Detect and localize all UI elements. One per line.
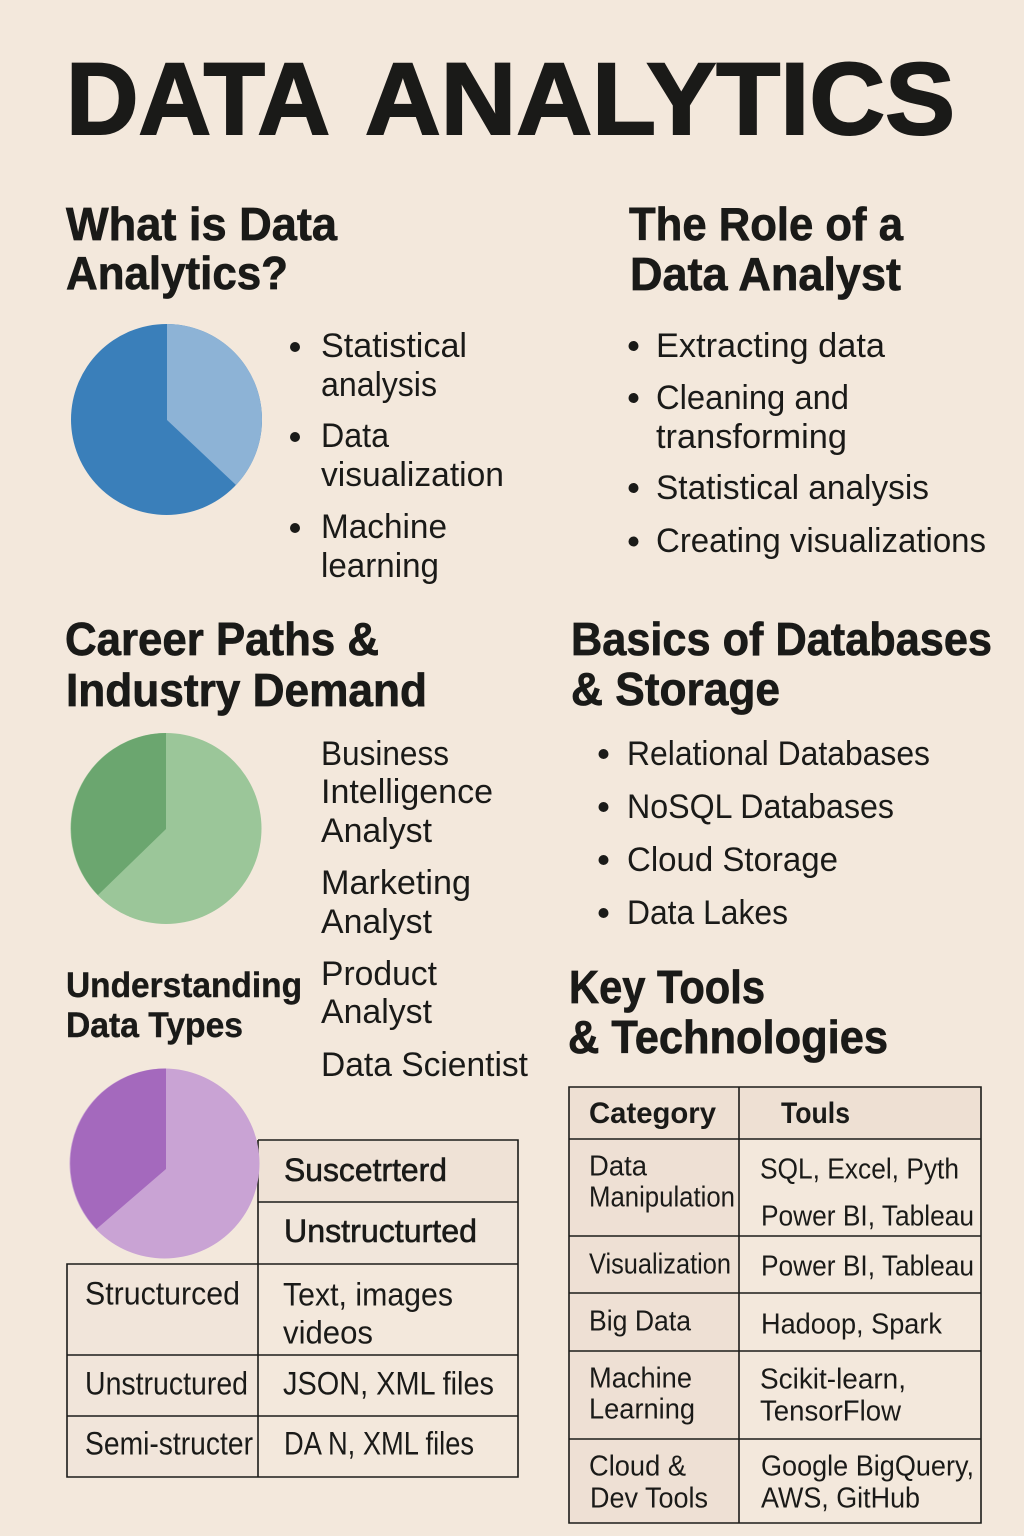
table: tools by category: Scikit-learn, [760, 1364, 906, 1396]
bullet list: analyst duties: transforming [656, 418, 847, 456]
text list: career roles: Analyst [321, 903, 433, 941]
bullet list: analytics topics: learning [321, 547, 439, 585]
panel: what is data analytics [66, 198, 504, 585]
heading: what is data analytics [66, 198, 337, 299]
bullet list: storage types: NoSQL Databases [627, 788, 894, 826]
table: tools by category [569, 1087, 981, 1523]
bullet list: analytics topics: visualization [321, 456, 504, 494]
table: tools by category: SQL, Excel, Pyth [760, 1154, 959, 1186]
heading: understanding data types [66, 966, 302, 1045]
table: tools by category: Dev Tools [590, 1483, 708, 1515]
heading: understanding data types: Understanding [66, 966, 302, 1005]
table: data types: Structurced [85, 1276, 240, 1312]
table: tools by category: Power BI, Tableau [761, 1201, 974, 1233]
heading: what is data analytics: What is Data [66, 198, 337, 250]
table: tools by category: TensorFlow [760, 1396, 902, 1428]
heading: what is data analytics: Analytics? [66, 247, 288, 299]
bullet list: analyst duties: Statistical analysis [656, 469, 929, 507]
table: tools by category: Power BI, Tableau [761, 1251, 974, 1283]
bullet list: storage types: Data Lakes [627, 894, 788, 932]
table: tools by category: Hadoop, Spark [761, 1309, 942, 1341]
heading: key tools and technologies [568, 961, 888, 1063]
bullet list: analytics topics: Machine [321, 508, 447, 546]
table: tools by category: Learning [589, 1394, 695, 1426]
panel: career paths [65, 613, 529, 1084]
table: tools by category: Machine [589, 1363, 692, 1395]
text list: career roles [321, 735, 529, 1084]
text list: career roles: Data Scientist [321, 1046, 529, 1084]
heading: key tools and technologies: & Technologies [568, 1011, 888, 1063]
bullet list: analytics topics: analysis [321, 366, 437, 404]
text list: career roles: Analyst [321, 812, 433, 850]
heading: databases and storage [571, 613, 992, 715]
heading: career paths [65, 613, 427, 716]
bullet list: analyst duties: Cleaning and [656, 379, 849, 417]
text list: career roles: Analyst [321, 993, 433, 1031]
heading: databases and storage: Basics of Databases [571, 613, 992, 665]
text list: career roles: Intelligence [321, 773, 493, 811]
panel: understanding data types [66, 966, 518, 1477]
bullet list: analyst duties [628, 327, 986, 560]
panel: role of a data analyst [628, 198, 986, 560]
heading: key tools and technologies: Key Tools [569, 961, 765, 1013]
table: tools by category: Big Data [589, 1306, 692, 1338]
bullet list: analyst duties: Extracting data [656, 327, 885, 365]
text list: career roles: Product [321, 955, 438, 993]
table: tools by category: Data [589, 1151, 648, 1183]
heading: role of a data analyst [629, 198, 903, 300]
table: data types: Text, images [283, 1277, 453, 1313]
table: data types: Unstructurted [284, 1213, 477, 1249]
table: data types: videos [283, 1315, 373, 1351]
bullet list: analytics topics: Statistical [321, 327, 467, 365]
table: data types: Suscetrterd [284, 1152, 447, 1188]
bullet list: analytics topics: Data [321, 417, 389, 455]
pie chart: purple [70, 1068, 260, 1258]
table: tools by category: Google BigQuery, [761, 1451, 974, 1483]
heading: understanding data types: Data Types [66, 1006, 243, 1045]
table: data types: JSON, XML files [283, 1366, 494, 1402]
title: ANALYTICS [365, 42, 955, 156]
bullet list: storage types: Cloud Storage [627, 841, 838, 879]
bullet list: storage types [598, 735, 930, 932]
table: tools by category: AWS, GitHub [761, 1483, 920, 1515]
table: tools by category: Category [589, 1097, 716, 1130]
heading: career paths: Career Paths & [65, 613, 379, 665]
table: data types: DA N, XML files [284, 1426, 474, 1462]
title [66, 42, 955, 156]
table: tools by category: Manipulation [589, 1182, 735, 1214]
bullet list: storage types: Relational Databases [627, 735, 930, 773]
heading: career paths: Industry Demand [66, 664, 427, 716]
table: data types: Unstructured [85, 1366, 248, 1402]
heading: role of a data analyst: The Role of a [629, 198, 903, 250]
table: data types [67, 1140, 518, 1477]
table: tools by category: Cloud & [589, 1451, 686, 1483]
table: tools by category: Touls [781, 1097, 850, 1130]
pie chart: blue [71, 324, 262, 515]
panel: databases and storage [571, 613, 992, 932]
pie chart: green [70, 733, 262, 924]
text list: career roles: Business [321, 735, 449, 773]
bullet list: analyst duties: Creating visualizations [656, 522, 986, 560]
panel: key tools and technologies [568, 961, 981, 1523]
table: tools by category: Visualization [589, 1249, 731, 1281]
heading: databases and storage: & Storage [571, 663, 780, 715]
text list: career roles: Marketing [321, 864, 471, 902]
heading: role of a data analyst: Data Analyst [630, 248, 901, 300]
title: DATA [66, 42, 330, 156]
table: data types: Semi-structer [85, 1426, 253, 1462]
bullet list: analytics topics [290, 327, 504, 585]
